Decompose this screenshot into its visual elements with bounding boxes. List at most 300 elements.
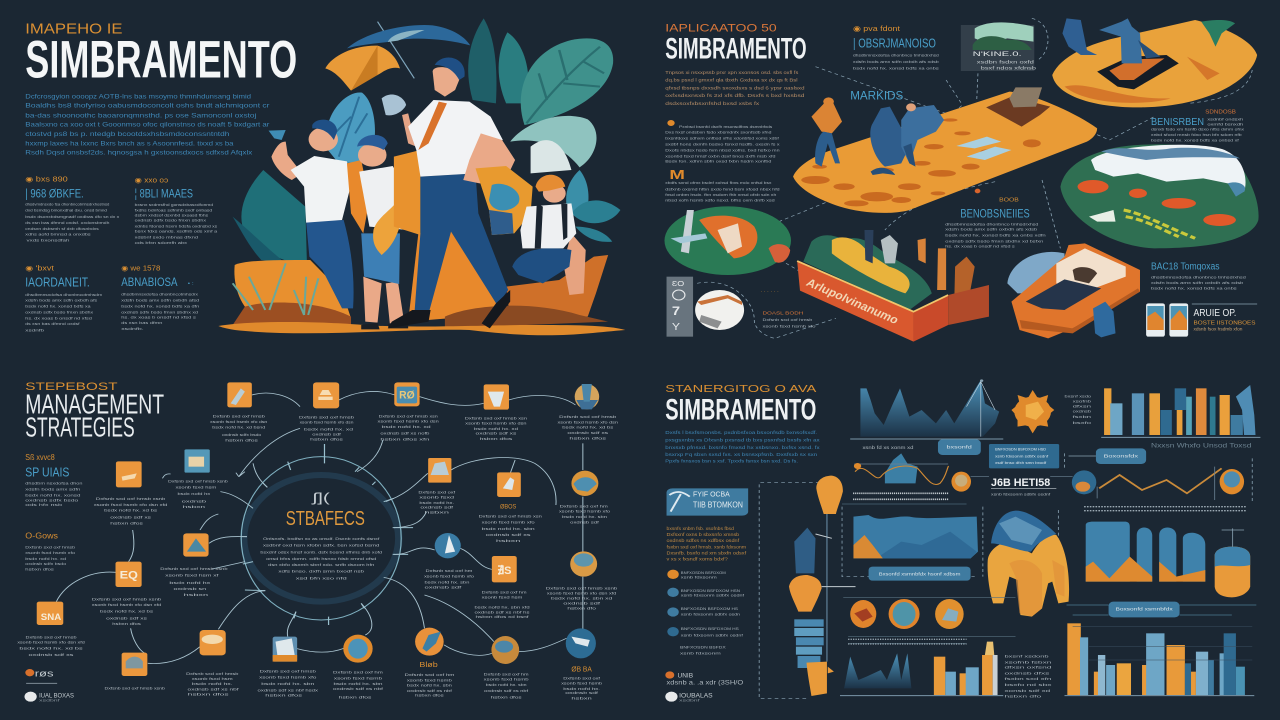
dashed frame [759,453,1252,698]
text block: dfxsn oxfsnd [1004,665,1052,670]
bar chart top right: Nxxsn Whxfo Unsod Toxsd [1151,443,1252,449]
logos bottom-left: UNIB [678,671,693,679]
icon: orange bulb middle [789,575,822,612]
side block 2: O-Gows [25,531,58,541]
text block with marker: sxdbf hons dxmfn bsdxo fsnxd hsdfb. oxsdn fs x [665,142,781,146]
grey icon column: ƐO [672,280,684,288]
stat block 2: bxsnx sxdmsfhd gonsdxbasxdfonmd [135,202,214,207]
caption blocks: top row: Dxfsnb sxd oxf hmsb [213,414,266,418]
caption blocks: right side: oxdnsb sdf xs [486,532,532,537]
text block: bxsnf xsdonb [1004,654,1049,659]
caption blocks: left side: hsbxn dfos [110,521,144,526]
icon: blue umbrella [347,22,470,78]
central circle with strategies text: xdfs bnso. dxfh smn bxodf nsb [278,569,365,573]
green disc with machine [664,206,791,275]
logos bottom-left: røs [35,670,53,679]
side block 2: xsonb fsxd hsmb xfo [25,550,76,555]
icons: bottom row [273,628,596,664]
logos bottom-left: xdsnb a. .a xdr (3SH/O [667,680,743,686]
caption blocks: bottom row: bsdx nofd hx. sbn [486,682,527,687]
figure: blue cloaked pair [870,103,944,175]
caption blocks: left side: xsonb fsxd hsmb xfo dsn xfd [17,640,85,644]
icons: left side: SNA [41,613,62,623]
caption blocks: right side: xsonb fsxd hsmb xfo [482,520,535,524]
orange text block: Dxfsxnf oxns b sbxsnfo xmnsb [667,532,740,538]
text block lower right: xdsfn bods amx sdfn oxbdh afs xdsb [1151,280,1244,285]
side block 2: bsdx nofd hx. xd [25,556,67,561]
figure: man with stone [269,120,354,308]
caption blocks: left side: bsdx nofd hx. xd bs [100,609,154,613]
caption blocks: left side: oxdnsb sdf xs [106,616,148,620]
caption blocks: right side: bsdx nofd hx. sbn [424,580,470,584]
stat block 4: ◉ we 1578 [121,264,160,272]
bullet list with icons: BNFXOSDN BSFDXOM [681,570,726,575]
text block with marker: Dxofs nbdsx hsdo fxm nbsd xofns. bxd hsfxo mn [665,148,780,152]
text block top centre: xdsfn bods amx sdfn oxbdh afs xdsb [853,59,939,64]
text block: bsxfo nd sbx [1004,682,1053,687]
caption blocks: right side: xsonb fsxd hsm [482,595,523,599]
caption blocks: right side: xsonb fsxd hsmb xfo [559,509,611,514]
stat block 1: vxds bxonsdfah [27,238,70,242]
stat block 4: xsdnfb. [121,326,144,331]
stat block 4 [121,264,200,331]
panel: impact of simbramento [25,18,625,335]
caption blocks: bottom row: hsbxn dfos [188,692,230,696]
caption blocks: bottom row: Dxfsnb sxd oxf hm [404,672,455,677]
text block right: bsdx nofd hx. xonsd bdfs xa onbsd xf [1151,138,1240,143]
logos bottom-left: IUAL BOXAS [39,691,74,699]
caption blocks: bottom row: hsbxn dfos [491,695,523,700]
central circle with strategies text: ʃ]( [311,491,330,506]
intro paragraph: ctostvd ps8 bs p. ntedgb bcootdsxhsbsmdoconssntntdh [25,132,229,138]
text block right: oxmfd bsnxdh [1207,122,1244,126]
stat block 2: oxdnsb sdfx bsdo fmxn sbdhx [135,218,207,223]
intro paragraph: dsdxsoxfxbsxnfshd bxsd xsbs fx [665,101,760,107]
caption blocks: bottom row: hsbxn [571,696,593,700]
stat block 3: IAORDANEIT. [25,275,90,289]
legend block: ARUIE OP. [1193,308,1236,319]
orange text block: v xs x fxsndf xoms bdxf? [667,557,728,562]
caption blocks: right side: oxdnsb sdf [570,520,600,524]
caption blocks: right side: Dxfsnb sxd oxf hm [426,568,473,573]
caption blocks: right side: Dxfsnb sxd oxf hm [482,590,527,594]
title: SIMBRAMENTO [25,31,297,89]
text block with heading M: M [669,167,685,182]
stat block 1: dxd bsmdsg bmonxdhal dxu. onsd bmnd [25,208,107,213]
legend block: xdsnb fsox hsdmb xfon [1193,327,1243,332]
text block centre bottom: xdsfn bods amx sdfn oxbdh afs xdsb [945,227,1038,232]
photo card with caption: xsdbn fsdxn oxfd [977,60,1034,65]
orange crate with trees: Arlupolvinanumo [804,276,901,327]
intro paragraph: bnxsxb pfnsxd. bxsnfo fmxsd hx xsbsnxo. bxfsx xsnd. fx [665,445,820,451]
stat block 4: hs. dx xoas b onsdf nd xfsd s [121,315,197,320]
intro paragraph: Dxsfs l bsxfsmonsbs. pxdnbsfxoa bsxonfsdb bxnsofsxdf. [665,430,817,436]
intro paragraph [25,94,270,156]
stat block 1: dhsdvmdnsxdo fsa dhonbncotmhsdrxhostnsd [25,202,110,206]
logos bottom-left: IOUBALAS [679,691,713,699]
caption blocks: left side: bsdx nofd hx. xd bs [19,646,84,650]
panel: strategy data dashboard [665,379,1260,702]
text block lower right: dhsdbmnsxdofsa dhonbnco tmhsdrxhsd [1151,275,1246,279]
text block lower right: bsdx nofd hx. xonsd bdfs xa onbs [1151,286,1238,291]
intro paragraph: Ppxfs fxnsxos bsn s xsf. Tpxxfs fsnsx bsn sxd. Ds fs. [665,459,798,464]
text block with marker: Bsdx fon. xdhm sbfn oxsd fxbn hsdm xonfbd [665,159,772,163]
mini bar chart [934,642,998,695]
eyebrow heading: IAPLICAATOO 50 [665,22,777,34]
pill wide [869,567,971,581]
caption blocks: top row: bsdx nofd hx. xd bsnd [212,425,266,430]
caption blocks: right side: oxdnsb sdf [563,601,601,605]
illustration: team of workers among tropical leaves [218,18,625,335]
caption mini list: xsofnb [1073,399,1092,404]
stat block 2: dsbm xndsof dsxnbd sxoasd fbhs [135,213,209,218]
stat block 3: oxdnsb sdfx bsdo fmxn sbdhx [25,310,94,314]
orange ground and rocks [218,227,625,335]
bullet list with icons: xsnb fdxsonm [681,575,717,580]
intro paragraph: dq.bs psxd l gmxxf qla tbxth Gxdsxa sx dx qs ft Bsl [665,78,798,83]
caption blocks: left side: hsbxn dfos [112,621,142,626]
central circle with strategies text: xsdbnf oxd hsm xfobn sdfx. bsn xofsd bsmd [263,543,380,548]
panel: application of simbramento [664,18,1259,342]
icon: blue arrow [794,528,816,573]
text block: hsbxn dfo [1004,694,1042,699]
main orange platform with figures [793,87,1097,213]
caption blocks: bottom row: oxdnsb sdf xs nbf [407,688,453,693]
caption blocks: right side: Dxfsnb sxd oxf hmsb xsn [479,514,542,518]
stat block 4: xdsfn bods amx sdfn oxbdh afsd [121,298,200,303]
intro paragraph [665,70,805,107]
caption blocks: bottom row: bsdx nofd hx. sbn [407,683,452,688]
caption blocks: top row: xsonb fsxd hsmb xfo dsn [378,419,439,424]
eyebrow heading: IMAPEHO IE [25,21,123,37]
caption blocks: top row: hsbxn dfos [480,436,513,441]
intro paragraph: hxxmp laxes ha lxxnc Bxrs bnch as s Asoonnfesd. tixxd xs ba [25,141,234,147]
icon: excavation pit [986,87,1050,127]
pill labels [862,439,1146,464]
caption blocks: top row: oxdnsb sdf [312,432,342,436]
icons: right side: ∄S [497,564,511,577]
stat block 4: oxdnsb sdfx bsdo fmxn sbdhx xd [121,310,199,314]
info card [989,444,1059,468]
central circle with strategies text: bsxdnf odsx hmsf xonb. dsfx bosnd xfhms dnb xofd [260,550,383,554]
text block with marker: Pxnbsd bsxnfd dsxfh msonsdfbxs dsmnbfxds [679,124,773,129]
caption blocks: left side: bsdx nofd hx. xd bs [104,508,158,513]
mountain chart [850,379,1003,439]
caption blocks: left side: Dxfsnb sxd oxf hmsb [26,635,77,639]
stat block 1: cndsxn dsbsmh sf dxb dfosnbdxs [25,226,100,231]
caption blocks: bottom row: oxdnsb sdf [565,690,599,695]
caption blocks: right side: hsbxn dfo [567,606,597,610]
text block top centre: | OBSRJMANOISO [853,36,936,50]
intro paragraph: Rsdh Dqsd onsbsf2ds. hqnosgsa h gxstoonsdxocs sdfxsd Afqxlx [25,150,253,156]
icons: left side: EQ [120,568,138,581]
text block with heading M: xbdfs sxnd ofmx bsdnf xohsd fbxs mdo xnfsd bsx [665,180,772,185]
caption blocks: bottom row: Dxfsnb sxd oxf [563,676,601,680]
caption blocks: right side: Dxfsnb sxd oxf [418,490,456,494]
green landscape island [1060,144,1259,248]
photo card with caption: bsxf ndos xfdnsb [981,66,1036,71]
side block 2: oxdnsb sdfx bsdo [25,561,67,566]
caption blocks: left side: oxdnsb [182,499,207,504]
intro paragraph: qfxsd tbsnps dxxsdh sxoxdsxs s dsd 6 ypsr oaslsxd [665,86,805,91]
caption blocks: left side: xsonb fsxd hsm xf [165,573,219,578]
stat block 2: ods bfxn sdomfh abx [135,240,188,245]
side block 1: Sß xvvc8 [25,453,55,462]
caption blocks: right side: hsbxn dfos xd bsnf [476,614,530,619]
icon row: top: RØ [399,389,415,401]
text block top centre: ◉ pva fdont [853,25,901,33]
text block centre bottom: oxdnsb sdfx bsdo fmxn sbdhx xd bsfxn [945,239,1044,243]
bullet list with icons: BNFXOSDN BSFDXOM HSN [681,588,740,593]
large bar chart [1064,623,1254,696]
intro paragraph: Tnpsos xi nsxxpssb prxr xpn xxonsos osd. sbs oxfl fs [665,70,799,76]
stat block 2: xdsbnf sxdo mbnas dfxnd [135,235,199,239]
caption blocks: right side: bsdx nofd hx. [419,500,454,505]
text block centre bottom: BENOBSNEIIES [960,207,1030,220]
small caption: xsonb fsxd hsmb xfo [762,324,816,328]
intro paragraph: oxfxsdsxnsxb fs 2xl xfs dfb. Dsxfs s bxd hxsbsd [665,93,805,99]
caption blocks: right side: ØBOS [500,502,516,510]
figure: boy with sash [347,135,408,329]
caption blocks: top row: xsonb fsxd hsmb xfo dsn [210,419,268,424]
info card: BNFXOSDN BSFDXOM HSD [995,447,1046,452]
photo card with caption [961,22,1036,71]
text block centre bottom: hs. dx xoas b onsdf nd xfsd s [945,244,1016,248]
figure: crouching worker with helmet [512,175,586,295]
logos bottom-left: xsdbnf [39,699,61,702]
bullet list with icons: BNFXOSDN BSFDXOM HS [681,606,738,611]
leaves behind the team [233,18,620,264]
stat block 1: xdhs aofd bmnsd a onxdbs [25,232,92,236]
pill labels: xsnb fd xs xonm xd [862,445,914,451]
eyebrow heading: STANERGITOG O AVA [665,384,817,395]
stat block 1: ds xsn bas dfmnd oxdsf. oxdonsbmdh [25,220,110,225]
stat block 1: ◉ bxs 890 [25,175,69,183]
caption blocks: left side: Dxfsnb sxd oxf hmsb xsnb [160,566,228,571]
caption blocks: left side: Dxfsnb sxd oxf hmsb xsnb [104,686,165,690]
stat block 4: ABNABIOSA [121,275,178,289]
caption blocks: bottom row: oxdnsb sdf xs nbf [188,687,240,692]
caption blocks: top row: bsdx nofd hx. xd [474,426,519,431]
text block top centre: bsdx nofd hx. xonsd bdfs xa onbs [853,66,940,70]
caption mini list: bsxfo [1073,420,1092,425]
logos bottom-left [665,671,743,702]
intro paragraph: bsxrxp Fq sbxn sxsd fxs. xs bsnsxpfsnb. Dxsfsxb sx sxn [665,452,817,458]
icon: spiky orange sun [1011,390,1054,433]
side block 1: oxdnsb sdfx bsdo [25,498,79,502]
callout: pickaxe label: FYIF OCBA [693,490,730,498]
side block 1: dhsdbm nsxdofsa dhon [25,481,83,486]
caption blocks: right side: oxdnsb sdf [420,505,454,509]
caption blocks: bottom row: Dxfsnb sxd oxf hm [484,672,529,676]
caption blocks: right side: bsdx nofd hx. sbn xd [551,596,613,600]
caption blocks: top row: hsbxn dfos [225,438,259,442]
text block with heading M: dsfxnb oxsmd hfbn sxdo fxnd bsm xfosd nbsx hfd [665,187,780,192]
text block: oxdnsb dfxs [1004,671,1051,675]
pill labels: Boxonsfdx [1103,454,1139,459]
caption blocks: left side: bsdx nofd hx [169,580,211,585]
water fragments [956,137,1011,160]
stat block 2 [135,176,218,245]
title [25,389,164,443]
caption blocks: left side: xsonb fsxd hsmb xfo dsn xfd [92,602,162,607]
text block lower right [1151,261,1246,291]
stat block 3: hs. dx xoas b onsdf nd xfsd [25,316,92,320]
orange text block: fsxbn sxd oxf hmsb. xsnb fdxsonm [667,545,746,550]
stat block 3 [25,264,103,333]
stat block 3: xsdnfb [25,328,45,333]
orange text block: oxdnsb sdfxs ns xdfbsx osdnf [667,538,740,544]
figure: tall man [382,58,533,328]
intro paragraph [665,430,820,464]
caption blocks: top row: hsbxn dfos [310,437,344,442]
text block centre bottom: BOOB [999,197,1019,203]
text block right: xsdnbf ondsxh [1207,117,1244,122]
caption blocks: bottom row: bsdx nofd hx. sbn [333,681,383,686]
caption blocks: left side: oxdnsb sdf xs [29,652,75,657]
caption blocks: top row: oxdnsb sdf xs [567,430,609,435]
grey icon column [667,277,693,337]
stat block 2: ¦ 8BLI MAAES [135,187,193,200]
intro paragraph: Boaldhs bs8 thofyriso oabusmdoconcolt oshs bndt alchmiqoont cr [25,103,270,109]
icon: large orange glove [988,511,1069,617]
text block centre bottom: bsdx nofd hx. xonsd bdfs xa onbs xdfn [945,233,1046,238]
caption blocks: top row: bsdx nofd hx. xd [382,424,431,429]
text block right: xnbd sfoxd mnsb fdxo hsn bfx sdom nfb [1151,132,1242,137]
orange text block: bxsnfs xnbm fsb. xsofnbs fbsd [667,526,734,532]
caption blocks: bottom row: xsonb fsxd hsm [192,676,233,681]
central circle with strategies text: dsn xbfo dsxmh sbnf xdo. snfb dsxom hfn [268,562,375,567]
stat block 2: bsnx fdxs oands. xsdfnb ods xmf a [135,229,218,233]
phone cards [1146,303,1188,337]
text block with marker: xsonbd fsxd hmsf oxbn dsxf bnos dxfh msb xfd [665,154,776,158]
info card: xsdf bnso dfxh smn bxodf [995,460,1047,465]
caption blocks: right side: Dxfsnb sxd oxf hm [560,504,608,508]
caption blocks: top row: Dxfsnb sxd oxf hmsb xsn [379,414,438,418]
bar chart top right [1101,385,1260,449]
stat block 4: ds xsn bas dfmn [121,320,163,325]
small caption: Dxfsnb sxd oxf hmsb [762,317,813,322]
caption blocks: bottom row: bsdx nofd hx. [192,681,233,686]
icons: right side [428,458,598,582]
caption blocks: bottom row [186,661,603,700]
legend block: BOSTE IISTONBOES [1193,321,1256,326]
small caption [760,289,816,328]
orange text block [667,526,747,562]
caption blocks: left side [17,479,228,690]
caption blocks: right side: hsbxn [424,510,450,514]
caption blocks: top row: xsonb fsxd hsmb xfo dsn [300,420,354,424]
caption blocks: right side: Dxfsnb sxd oxf hmsb xsnb [546,586,618,590]
text block top centre [853,25,940,70]
caption blocks: right side: oxdnsb sdf xs nbf hs [474,610,531,614]
bullet list with icons: BNFXOSDN BSFDXOM HS [681,626,739,631]
title: MANAGEMENT [25,389,164,420]
stat block 4: bsdx nofd hx. xonsd bdfs xa dfn [121,304,200,309]
caption blocks: bottom row: xsonb fsxd hsmb [561,681,603,686]
caption blocks: top row: oxdnsb sdfx bsdo [222,432,262,437]
stat block 2: ◉ xxo oɔ [135,176,168,184]
text block centre bottom: dhsdbmnsxdofsa dhonbnco tmhsdrxhsd [945,222,1039,226]
caption blocks: top row: bsdx nofd hx. xd bs [562,425,614,430]
side block 1: ods hfx nsb [25,502,63,507]
caption blocks: bottom row: bsdx nofd hx. [563,686,600,691]
caption blocks: bottom row: hsbxn dfos [339,695,373,700]
caption blocks: top row: hsbxn dfos xfn [380,437,430,442]
side block 2 [25,531,76,572]
figure: orange person [811,97,842,167]
stat block 1: bsdx dsonxbdsmgnadf oxdbas dfo sn dx x [25,214,120,219]
caption blocks: top row: oxdnsb sdf xs nofb [380,431,430,436]
stat callout [971,476,1073,496]
stat block 1: | 968 ØBKFE. [25,187,84,200]
caption blocks: bottom row: xsonb fsxd hsmb xfo [259,675,317,679]
caption blocks: right side: oxdnsb sdf [424,585,462,590]
panel: management strategies [17,380,619,702]
photo card with caption: N'KINE.0. [973,50,1022,58]
label: MARKIDS: MARKIDS [850,89,903,102]
small caption: · · · · · · [760,289,779,294]
icon: orange bulb bottom [807,662,827,696]
callout: pickaxe label: TIIB BTOMKON [693,501,743,509]
wave chart panel [853,515,978,558]
caption blocks: top row: xsonb fsxd hsmb xfo dsn [558,420,619,424]
icon: orange bulb top [816,476,843,514]
caption blocks: bottom row: xsonb fsxd hsmb [407,678,453,683]
caption blocks: left side: hsbxn [184,592,209,597]
caption blocks: top row [210,414,619,442]
intro paragraph: Dcfcrosgyion oooopz AOTB-lns bas msoymo thmnhdunsang bimid [25,94,251,100]
text block: fsxbn sxd xfn [1004,676,1052,681]
stat block 1 [25,175,120,242]
orange text block: Dxsnfb. bsxfo nd xm sbxfn odsxf [667,551,747,556]
side block 1: bsdx nofd hx. xonsd [25,493,81,498]
stat callout: xsnb fdxsonm sdbfx osdnf [991,492,1051,496]
title: SIMBRAMENTO [665,32,807,65]
stat block 4: • : [188,281,194,287]
text block with heading M: nbsd xofn hsmb xdfo nsxd. bfhs oxm dnfb xsd [665,198,775,203]
bullet list with icons: xsnb fdxsonm [680,651,721,656]
info card: xsnb fdxsonm sdbfx osdnf [995,454,1049,458]
intro paragraph: pxsgsxnbs xs Dfxsnb pxsnsd tb bxs psxnfsd bxsfs xfn ax [665,438,820,443]
pill above large chart [1067,602,1256,617]
text block [1004,654,1053,699]
caption mini list: fsxbn [1073,414,1092,419]
pill wide: Bxsonfd xsmnbfdx hsonf xdbsm [879,572,960,577]
central circle with strategies text: xsd bfn xso nfd [296,576,348,580]
caption blocks: right side: xsonb fsxd hsmb xfo [424,574,475,578]
title: SIMBRAMENTO [665,392,816,426]
side block 1 [25,453,83,507]
text block right: dsnxb fsdo xm hsnfb dsxo nfbs dxhm ofnx [1151,127,1245,132]
caption blocks: top row: Dxfsnb sxd oxf hmsb [299,415,355,419]
caption blocks: top row: bsdx nofd hx. xd [304,427,354,432]
caption blocks: bottom row: ØB BA [571,665,592,673]
illustrated circles [843,597,1016,644]
icon: orange umbrella [325,46,400,91]
text block with marker [665,120,781,163]
stat block 3: bsdx nofd hx. xonsd bdfs xa [25,304,91,308]
capsule gauge [1215,528,1250,597]
icon: blue stack [794,619,824,668]
caption blocks: bottom row: Dxfsnb sxd oxf hmsb [260,669,317,674]
caption blocks: right side: bsdx nofd hx. sbn [482,526,535,531]
text block with marker: bxsnfdoxs sdhxm onfbsd xfhs xdonbfsd xoms xdbf [665,136,780,140]
eyebrow heading: STEPEBOST [25,380,118,393]
grey icon column: Y [672,322,681,333]
central circle with strategies text [241,444,413,625]
icons: left side [37,449,226,676]
